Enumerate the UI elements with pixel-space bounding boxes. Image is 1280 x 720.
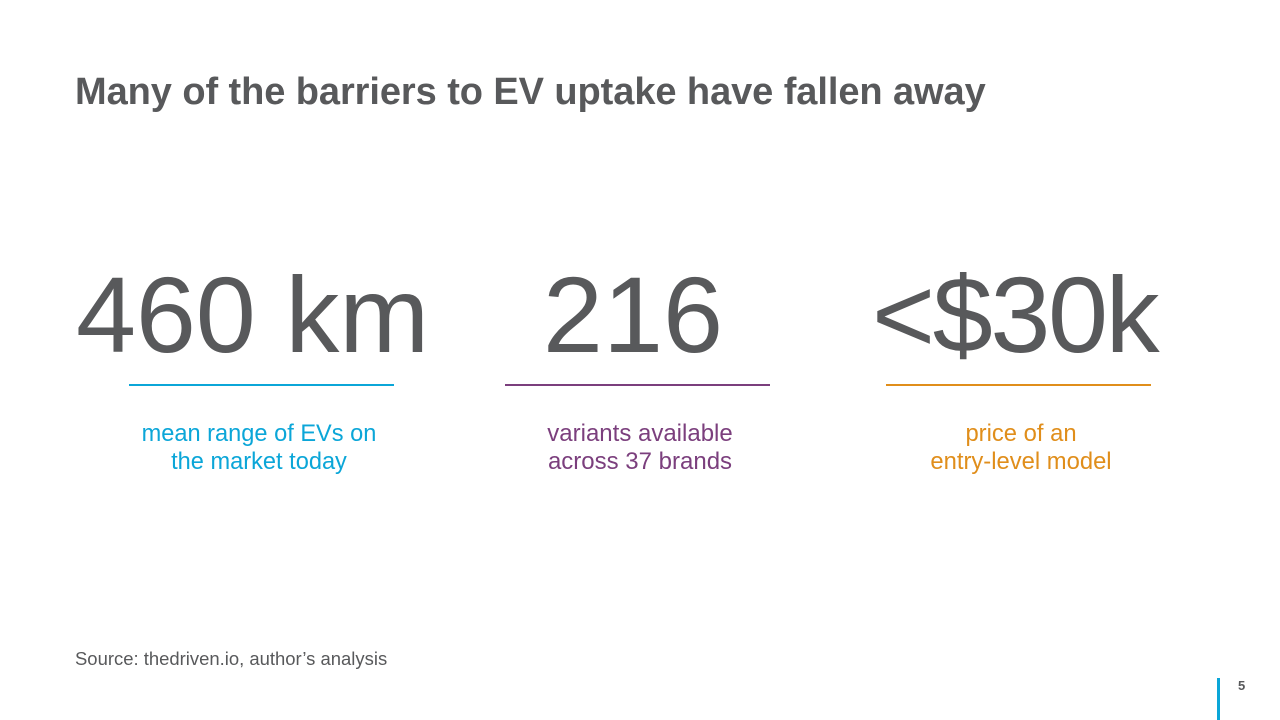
caption: variants — [547, 420, 733, 475]
source note: Source: thedriven.io, author’s analysis — [75, 648, 387, 669]
page number: 5 — [1238, 678, 1245, 693]
stat: price: <$30k — [872, 254, 1157, 375]
stat: variants: 216 — [543, 254, 723, 375]
rule: range — [129, 384, 394, 386]
page number marker — [1217, 678, 1220, 720]
caption: range — [142, 421, 376, 475]
caption: range: mean range of EVs on — [142, 421, 376, 447]
caption: variants: across 37 brands — [548, 448, 732, 475]
title: Many of the barriers to EV uptake have fallen away — [75, 71, 986, 113]
rule: price — [886, 384, 1151, 386]
caption: price — [930, 420, 1112, 475]
caption: price: price of an — [965, 420, 1077, 447]
rule: variants — [505, 384, 770, 386]
caption: range: the market today — [171, 449, 347, 475]
caption: variants: variants available — [547, 420, 733, 447]
stat: range: 460 km — [76, 254, 429, 375]
caption: price: entry-level model — [930, 448, 1112, 475]
